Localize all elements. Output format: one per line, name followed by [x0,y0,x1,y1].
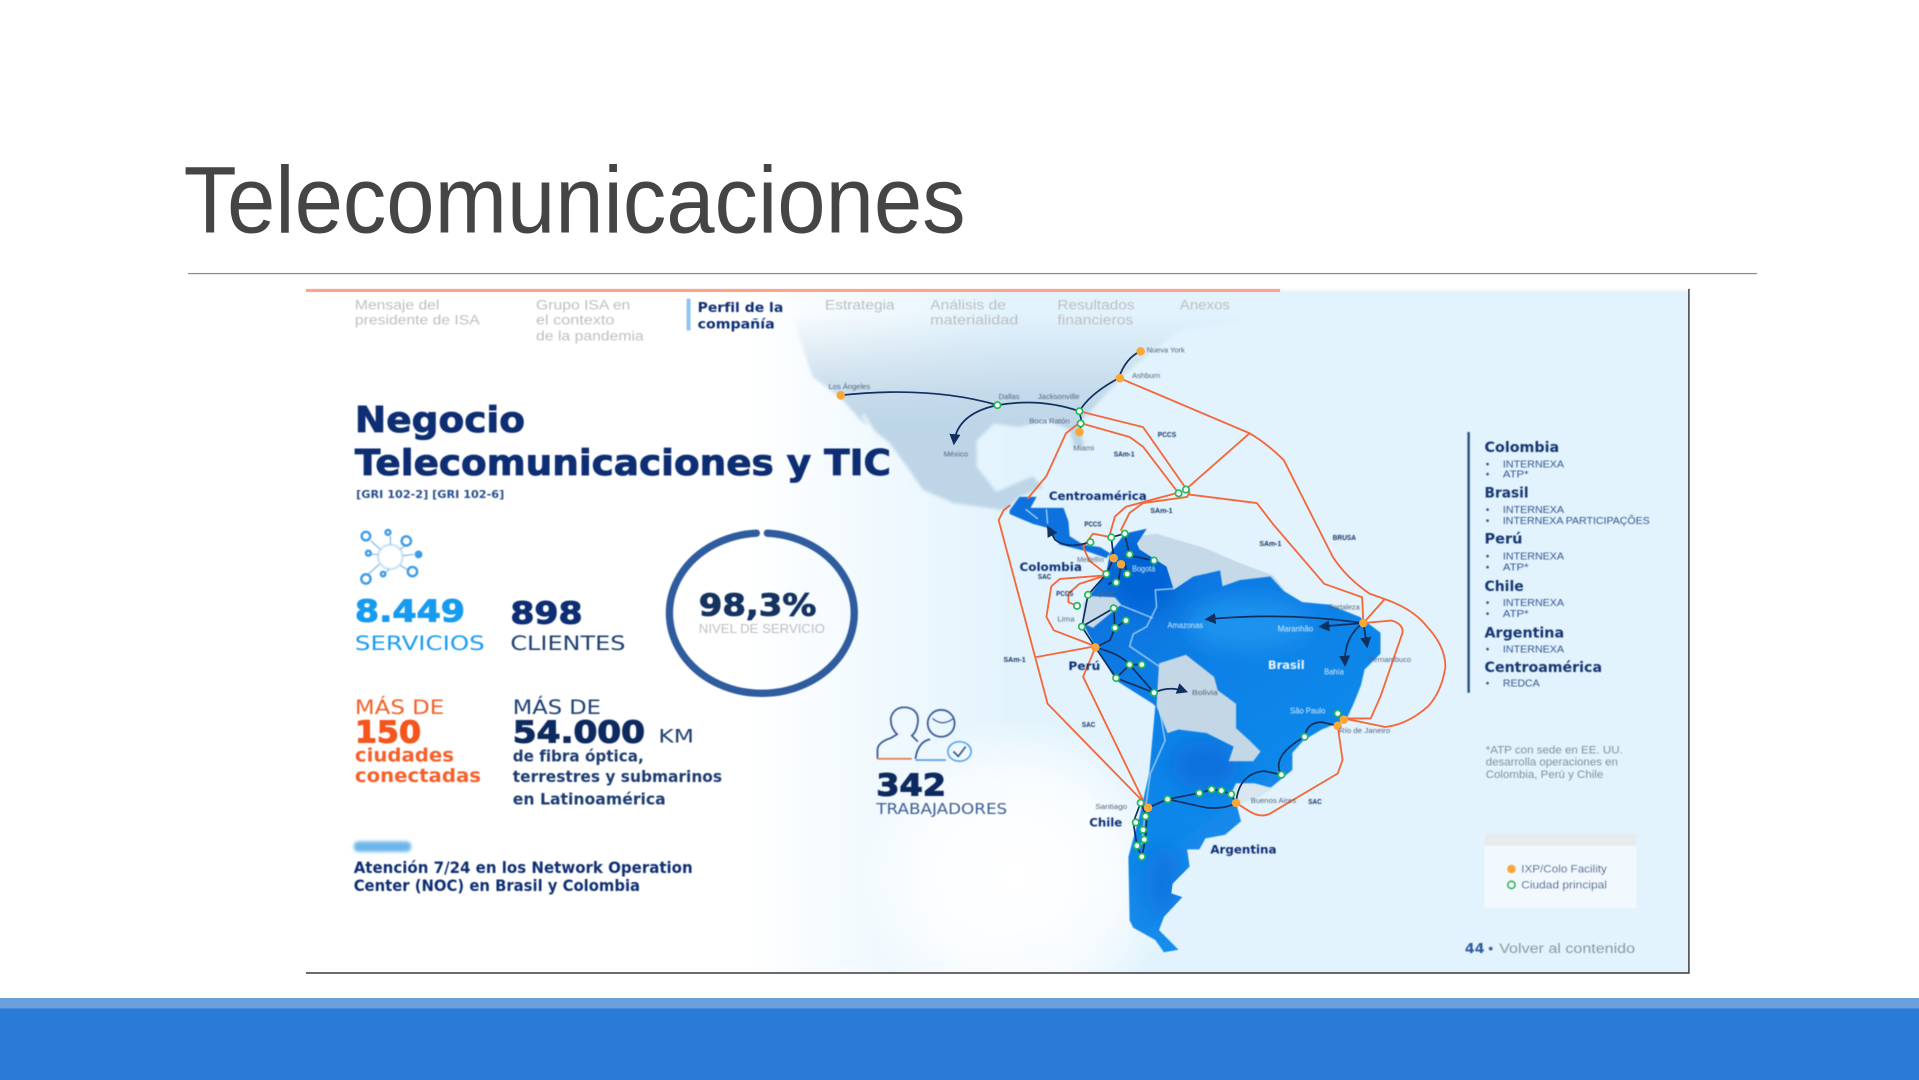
navigation tabs: el contexto [536,311,615,327]
stat: más de 150 ciudades conectadas [355,696,481,787]
map: city and cable labels: BRUSA [1333,533,1357,542]
panel: embedded report page [306,289,1689,973]
map: city and cable labels: Amazonas [1168,621,1203,630]
map: city and cable labels: Centroamérica [1049,489,1147,503]
list: operating companies by country: INTERNEXA [1503,598,1564,609]
navigation tabs: compañía [698,317,775,333]
callout: NOC attention: Center (NOC) en Brasil y Colombia [354,876,640,895]
map: city and cable labels [829,346,1411,857]
callout: NOC attention: Atención 7/24 en los Network Operation [354,858,693,877]
stat: 342 trabajadores: TRABAJADORES [875,801,1007,818]
navigation tabs: de la pandemia [536,327,644,343]
map: city and cable labels: SAm-1 [1259,539,1281,548]
stat: más de 150 ciudades conectadas: conectadas [355,766,481,787]
bottom band [0,998,1919,1080]
list: operating companies by country: • [1486,516,1490,527]
navigation tabs: Grupo ISA en [536,297,630,313]
stat: más de 54.000 km de fibra óptica: en Latinoamérica [513,790,666,809]
map: city and cable labels: Maranhão [1278,625,1314,634]
map: city and cable labels: Santiago [1095,802,1127,811]
page footer: 44 volver al contenido: 44 [1465,942,1485,957]
stat: 898 clientes [510,597,625,655]
icon: workers [878,707,971,761]
list: operating companies by country: • [1486,562,1490,573]
map: city and cable labels: São Paulo [1290,707,1326,716]
navigation tabs [355,297,1230,343]
list: operating companies by country: • [1486,598,1490,609]
stat: más de 54.000 km de fibra óptica: de fibra óptica, [513,746,644,765]
list: operating companies by country: ATP* [1503,562,1529,573]
map: city and cable labels: Brasil [1268,658,1305,672]
list: operating companies by country: INTERNEXA [1503,551,1564,562]
map: city and cable labels: Bahía [1324,667,1344,676]
map: IXP / colo nodes (orange) [837,347,1368,812]
page footer: 44 volver al contenido [1465,940,1635,957]
chart: network map of the Americas [793,306,1445,952]
map: city and cable labels: Boca Ratón [1029,416,1070,425]
stat ring: 98,3% nivel de servicio: NIVEL DE SERVICIO [699,621,825,636]
list: operating companies by country: INTERNEXA [1503,644,1564,655]
navigation tabs: Perfil de la [698,301,783,316]
map: city and cable labels: Bolivia [1192,688,1219,697]
map: city and cable labels: PCCS [1158,430,1176,439]
map: city and cable labels: Miami [1073,443,1095,452]
page footer: 44 volver al contenido: Volver al contenido [1499,940,1635,956]
map: city and cable labels: Quito [1097,589,1115,598]
stat: más de 54.000 km de fibra óptica: 54.000 [513,715,645,750]
list: operating companies by country: • [1486,505,1490,516]
icon: network [361,530,421,584]
stat: más de 54.000 km de fibra óptica [513,696,722,809]
map: city and cable labels: Bogotá [1132,565,1156,574]
map: terrestrial routes (navy) [840,351,1367,857]
list: operating companies by country: Chile [1485,579,1524,595]
map: city and cable labels: Perú [1068,659,1100,673]
stat: 342 trabajadores [875,769,1007,818]
map: submarine cable routes (orange) [999,378,1445,815]
navigation tabs: Anexos [1180,297,1230,313]
heading: Negocio Telecomunicaciones y TIC [355,400,891,501]
map: city and cable labels: Los Ángeles [829,382,870,391]
map: city and cable labels: PCCS [1056,589,1073,598]
stat ring: 98,3% nivel de servicio: 98,3% [699,589,816,624]
map: city and cable labels: Dallas [999,392,1020,401]
legend [1485,833,1636,908]
map: city and cable labels: Fortaleza [1329,603,1361,612]
page footer: 44 volver al contenido: • [1488,940,1493,956]
stat: más de 150 ciudades conectadas: MÁS DE [355,696,444,719]
title: Telecomunicaciones [184,148,966,253]
stat: 8.449 servicios [355,595,485,655]
stat: más de 150 ciudades conectadas: 150 [355,715,421,750]
horizontal rule under title [188,273,1757,274]
map: South American territory [1010,497,1381,952]
list: operating companies by country: Argentina [1485,626,1564,642]
map: city and cable labels: SAC [1308,797,1322,806]
legend: IXP/Colo Facility [1521,864,1607,876]
map: North America and Caribbean landmass [793,306,1253,510]
footnote: ATP [1486,744,1623,781]
stat: más de 54.000 km de fibra óptica: MÁS DE [513,696,601,719]
list: operating companies by country: Colombia [1485,440,1559,456]
stat: más de 54.000 km de fibra óptica: terrestres y submarinos [513,767,722,786]
navigation tabs: materialidad [930,311,1018,327]
heading: Negocio Telecomunicaciones y TIC: [GRI 102-2] [GRI 102-6] [356,488,504,501]
map: city and cable labels: Río de Janeiro [1339,726,1390,735]
callout: NOC attention [354,841,693,895]
stat: 898 clientes: 898 [510,597,583,632]
list: operating companies by country: INTERNEXA PARTICIPAÇÕES [1503,514,1650,527]
navigation tabs: Mensaje del [355,297,439,313]
map: city and cable labels: Buenos Aires [1251,796,1296,805]
list: operating companies by country: ATP* [1503,469,1529,480]
navigation tabs: Análisis de [930,297,1006,313]
legend: Ciudad principal [1521,880,1607,892]
map: city and cable labels: Nueva York [1147,346,1185,355]
map: city and cable labels: SAm-1 [1004,655,1026,664]
heading: Negocio Telecomunicaciones y TIC: Telecomunicaciones y TIC [355,443,891,484]
map: city and cable labels: Colombia [1019,560,1082,574]
list: operating companies by country: Perú [1485,531,1522,547]
map: city and cable labels: Jacksonville [1038,392,1079,401]
map: city and cable labels: SAC [1038,572,1052,581]
footnote: ATP: Colombia, Perú y Chile [1486,769,1603,781]
navigation tabs: financieros [1057,311,1133,327]
stat: 898 clientes: CLIENTES [510,632,625,655]
map: city and cable labels: México [944,450,968,459]
list: operating companies by country: • [1486,644,1490,655]
list: operating companies by country: REDCA [1503,679,1540,690]
map: city and cable labels: Ashburn [1132,371,1160,380]
list: operating companies by country: ATP* [1503,609,1529,620]
map: city and cable labels: Medellín [1077,555,1104,564]
list: operating companies by country: • [1486,460,1490,471]
heading: Negocio Telecomunicaciones y TIC: Negocio [355,400,525,441]
list: operating companies by country: • [1486,551,1490,562]
footnote: ATP: desarrolla operaciones en [1486,757,1618,769]
list: operating companies by country: Centroamérica [1485,660,1602,676]
stat: 8.449 servicios: SERVICIOS [355,632,485,655]
list: operating companies by country: INTERNEXA [1503,505,1564,516]
navigation tabs: Resultados [1057,297,1135,313]
stat: 342 trabajadores: 342 [876,769,946,804]
stat: 8.449 servicios: 8.449 [355,595,465,630]
map: city and cable labels: Lima [1057,615,1076,624]
footnote: ATP: *ATP con sede en EE. UU. [1486,744,1623,756]
list: operating companies by country: • [1486,609,1490,620]
map: city and cable labels: SAm-1 [1150,506,1172,515]
list: operating companies by country: Brasil [1485,486,1529,502]
list: operating companies by country: • [1486,469,1490,480]
navigation tabs: presidente de ISA [355,311,480,327]
map: city and cable labels: SAC [1082,720,1096,729]
list: operating companies by country [1467,432,1650,693]
stat ring: 98,3% nivel de servicio [669,533,854,693]
stat: más de 150 ciudades conectadas: ciudades [355,745,454,766]
map: city and cable labels: PCCS [1084,519,1102,528]
map: city and cable labels: Pernambuco [1368,655,1411,664]
map: main city nodes (green) [994,402,1341,860]
map: city and cable labels: Chile [1089,816,1122,830]
stat: más de 54.000 km de fibra óptica: KM [658,726,694,747]
map: city and cable labels: SAm-1 [1114,450,1135,459]
list: operating companies by country: INTERNEXA [1503,460,1564,471]
map: city and cable labels: Argentina [1210,843,1276,857]
navigation tabs: Estrategia [825,297,895,313]
list: operating companies by country: • [1486,679,1490,690]
